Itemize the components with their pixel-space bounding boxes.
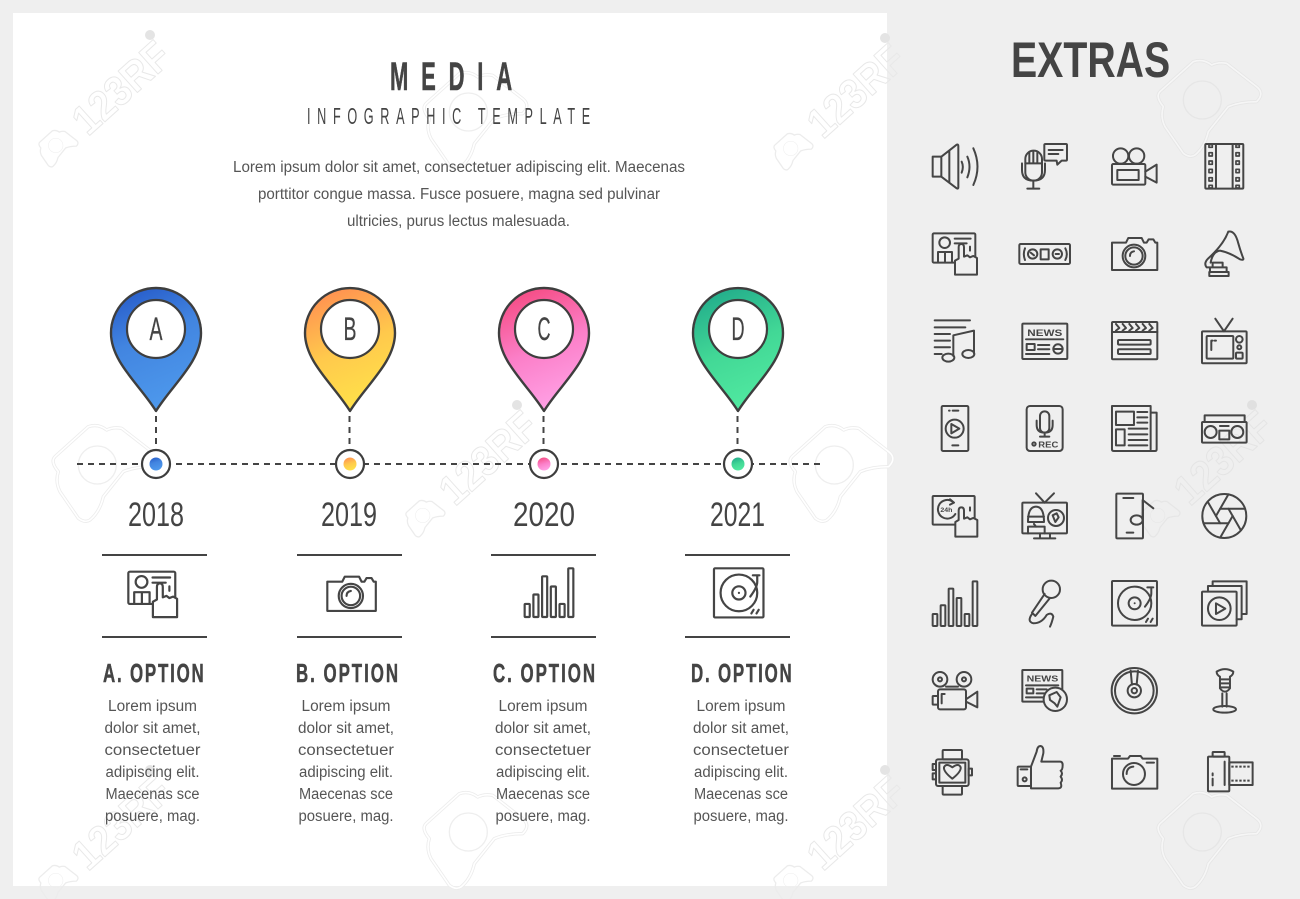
option text D: posuere, mag. bbox=[694, 808, 788, 825]
year A: 2018 bbox=[128, 496, 184, 534]
pin C: C bbox=[538, 311, 550, 347]
icon: speaker bbox=[933, 144, 977, 189]
icon: aperture bbox=[1202, 494, 1246, 538]
rule top C bbox=[491, 554, 596, 556]
icon: clapperboard bbox=[1112, 322, 1157, 359]
option heading C: C. OPTION bbox=[493, 658, 595, 688]
icon: thumbs up bbox=[1018, 746, 1063, 788]
watermarks: 123RF bbox=[1165, 402, 1281, 514]
white panel bbox=[13, 13, 887, 886]
option text B: Maecenas sce bbox=[299, 786, 393, 803]
option text C bbox=[495, 698, 591, 825]
column B bbox=[296, 288, 402, 825]
icon: television bbox=[1202, 319, 1247, 363]
extras icon grid bbox=[933, 144, 1253, 795]
connector C bbox=[542, 416, 544, 450]
option text B: dolor sit amet, bbox=[298, 720, 394, 737]
icon: recording: REC bbox=[1038, 439, 1059, 449]
rule bottom A bbox=[102, 636, 207, 638]
column C bbox=[491, 288, 596, 825]
icon: 24h touch bbox=[933, 496, 977, 537]
icon: world news: NEWS bbox=[1027, 674, 1059, 684]
timeline node D bbox=[724, 450, 752, 478]
icon: id card touch bbox=[933, 233, 977, 275]
timeline node A bbox=[142, 450, 170, 478]
watermarks: 123RF bbox=[798, 767, 914, 879]
icon: camera bbox=[327, 577, 376, 611]
option text D: dolor sit amet, bbox=[693, 720, 789, 737]
option text A: dolor sit amet, bbox=[104, 720, 200, 737]
icon: turntable bbox=[714, 568, 763, 617]
icon: news: NEWS bbox=[1027, 328, 1062, 338]
timeline node B bbox=[336, 450, 364, 478]
pin D: D bbox=[732, 311, 744, 347]
icon: film strip bbox=[1205, 144, 1243, 189]
connector D bbox=[736, 416, 738, 450]
icon: photo camera bbox=[1112, 238, 1157, 270]
option text A: consectetuer bbox=[104, 742, 200, 759]
icon: bar signal bbox=[525, 568, 573, 617]
option heading A: A. OPTION bbox=[103, 658, 204, 688]
rule top B bbox=[297, 554, 402, 556]
option heading B: B. OPTION bbox=[296, 658, 398, 688]
icon: smart watch bbox=[933, 750, 972, 795]
option text D: adipiscing elit. bbox=[694, 764, 788, 781]
rule top A bbox=[102, 554, 207, 556]
watermarks: 123RF bbox=[63, 767, 179, 879]
option text B bbox=[298, 698, 394, 825]
rule top D bbox=[685, 554, 790, 556]
option text B: adipiscing elit. bbox=[299, 764, 393, 781]
icon: bar signal bbox=[933, 581, 977, 626]
icon: news bbox=[1022, 324, 1067, 359]
extras heading: EXTRAS bbox=[1011, 31, 1170, 88]
intro paragraph bbox=[233, 159, 685, 230]
subtitle: INFOGRAPHIC TEMPLATE bbox=[307, 103, 590, 129]
option text A bbox=[104, 698, 200, 825]
year C: 2020 bbox=[513, 496, 575, 534]
pin D bbox=[693, 288, 784, 411]
timeline dashed line bbox=[77, 463, 822, 465]
icon: microphone with speech bubble bbox=[1022, 144, 1067, 189]
icon: 24h touch: 24h bbox=[940, 507, 952, 514]
icon: retro microphone bbox=[1213, 669, 1236, 713]
icon: disc bbox=[1112, 668, 1157, 713]
option text C: dolor sit amet, bbox=[495, 720, 591, 737]
option text A: posuere, mag. bbox=[105, 808, 200, 825]
icon: gramophone bbox=[1205, 231, 1243, 276]
connector A bbox=[155, 416, 157, 450]
intro paragraph: ultricies, purus lectus malesuada. bbox=[347, 213, 570, 230]
icon: cine camera bbox=[933, 672, 977, 709]
title: MEDIA bbox=[390, 54, 512, 99]
icon: newspaper bbox=[1112, 406, 1157, 451]
option text A: Maecenas sce bbox=[106, 786, 200, 803]
column D bbox=[685, 288, 792, 825]
pin B: B bbox=[344, 311, 356, 347]
icon: music playlist bbox=[935, 320, 974, 362]
icon: phone music bbox=[1116, 494, 1153, 538]
option text C: consectetuer bbox=[495, 742, 591, 759]
option text B: consectetuer bbox=[298, 742, 394, 759]
icon: recording bbox=[1027, 406, 1063, 451]
rule bottom D bbox=[685, 636, 790, 638]
option text D bbox=[693, 698, 789, 825]
year D: 2021 bbox=[710, 496, 765, 534]
option text C: posuere, mag. bbox=[496, 808, 590, 825]
year B: 2019 bbox=[321, 496, 377, 534]
icon: id card touch bbox=[128, 572, 177, 617]
watermarks: 123RF bbox=[430, 402, 546, 514]
icon: tv news anchor bbox=[1022, 493, 1067, 538]
icon: world news bbox=[1022, 670, 1067, 711]
timeline node C bbox=[530, 450, 558, 478]
connector B bbox=[348, 416, 350, 450]
option text A: Lorem ipsum bbox=[108, 698, 197, 715]
icon: phone video bbox=[942, 406, 968, 451]
icon: film roll bbox=[1208, 752, 1253, 791]
watermarks: 123RF bbox=[798, 35, 914, 147]
option text D: Maecenas sce bbox=[694, 786, 788, 803]
intro paragraph: porttitor congue massa. Fusce posuere, magna sed pulvinar bbox=[258, 186, 660, 203]
pin C bbox=[499, 288, 590, 411]
icon: video playlist bbox=[1202, 581, 1247, 626]
icon: turntable bbox=[1112, 581, 1157, 626]
intro paragraph: Lorem ipsum dolor sit amet, consectetuer adipiscing elit. Maecenas bbox=[233, 159, 685, 176]
option text C: Maecenas sce bbox=[496, 786, 590, 803]
pin A bbox=[111, 288, 202, 411]
pin B bbox=[305, 288, 396, 411]
option text D: consectetuer bbox=[693, 742, 789, 759]
icon: compact camera bbox=[1112, 756, 1157, 789]
option text A: adipiscing elit. bbox=[106, 764, 200, 781]
option heading D: D. OPTION bbox=[691, 658, 792, 688]
option text C: Lorem ipsum bbox=[498, 698, 588, 715]
rule bottom B bbox=[297, 636, 402, 638]
rule bottom C bbox=[491, 636, 596, 638]
icon: hand microphone bbox=[1030, 581, 1060, 627]
icon: mixer panel bbox=[1019, 244, 1070, 264]
option text D: Lorem ipsum bbox=[696, 698, 786, 715]
option text B: Lorem ipsum bbox=[302, 698, 390, 715]
column A bbox=[102, 288, 207, 825]
watermarks: 123RF bbox=[63, 32, 179, 144]
icon: video camera bbox=[1112, 148, 1157, 185]
option text B: posuere, mag. bbox=[298, 808, 394, 825]
option text C: adipiscing elit. bbox=[496, 764, 590, 781]
icon: radio bbox=[1202, 415, 1247, 443]
pin A: A bbox=[150, 311, 163, 347]
